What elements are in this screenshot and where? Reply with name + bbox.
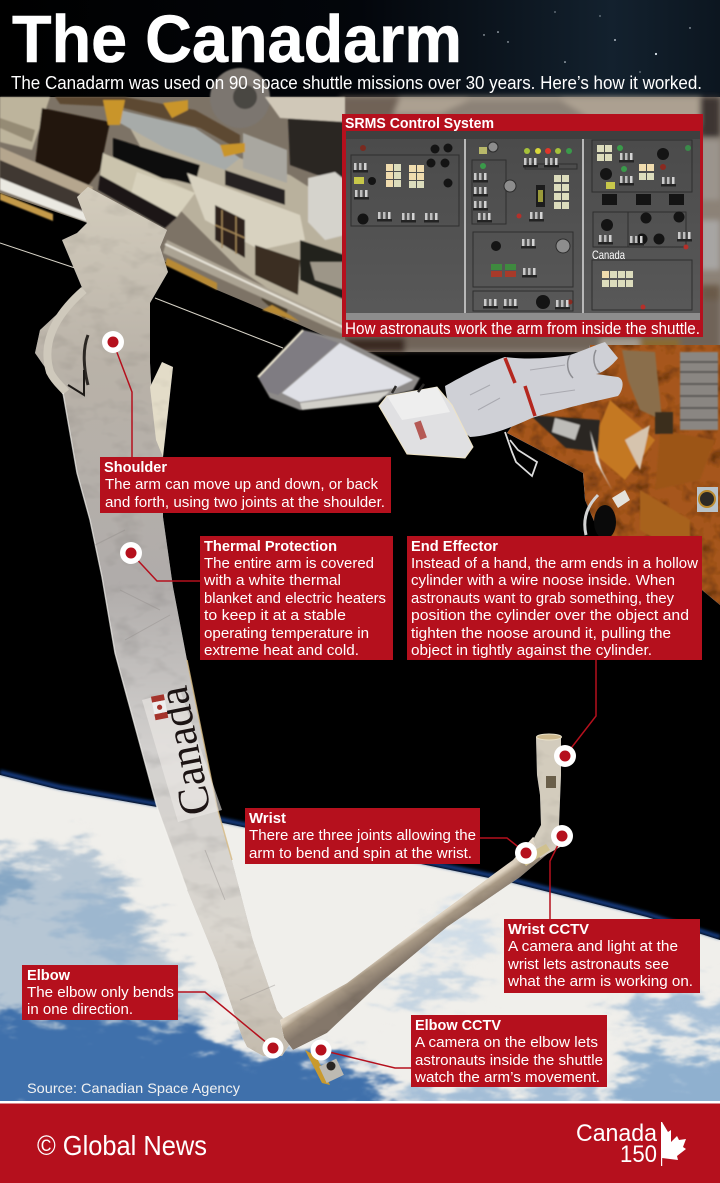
callout: shoulder [100,457,391,513]
marker: elbow [262,1038,284,1058]
logo: Canada 150: 150 [620,1141,657,1168]
callout: thermal protection: The entire arm is covered [204,556,374,572]
callout: wrist: Wrist [249,810,286,827]
callout: end effector: tighten the noose around it, pulling the [411,626,671,642]
header starfield band [0,0,720,97]
arm lettering: Canada wordmark: Canada [148,682,221,819]
photo: astronaut [379,342,623,476]
leader lines [113,342,596,1068]
callout: thermal protection: Thermal Protection [204,538,337,555]
callout: wrist CCTV: Wrist CCTV [508,921,589,938]
photo: gold foil satellite [507,345,720,605]
callout: elbow: in one direction. [27,1002,133,1018]
Canadarm arm [35,187,562,1085]
callout: thermal protection: to keep it at a stable [204,608,346,624]
callout: end effector: End Effector [411,538,498,555]
marker: wrist CCTV [551,825,573,847]
marker: shoulder [102,331,124,353]
panel heading: SRMS Control System [345,115,494,132]
callout: wrist CCTV: wrist lets astronauts see [507,957,669,973]
marker: wrist [515,842,537,864]
callout: thermal protection: with a white thermal [203,573,341,589]
callout: wrist [245,808,480,864]
control panel illustration [346,131,700,320]
panel Canada logotype: Canada [592,248,625,262]
callout: wrist: There are three joints allowing the [249,828,476,844]
callout: wrist CCTV: A camera and light at the [508,939,678,955]
marker: elbow CCTV [310,1040,332,1060]
title: The Canadarm [12,2,462,77]
wrist and end effector [533,736,562,858]
callout: elbow: Elbow [27,967,70,984]
footer band [0,1101,720,1183]
callout: end effector [407,536,702,660]
marker: thermal protection [120,542,142,564]
callout: wrist: arm to bend and spin at the wrist. [249,846,472,862]
logo: Canada 150: Canada [576,1120,658,1147]
upper arm with shoulder [35,187,296,1056]
footer: Global News credit: © Global News [37,1130,207,1161]
marker: end effector [554,745,576,767]
callout: thermal protection [200,536,393,660]
callout: elbow CCTV: A camera on the elbow lets [415,1035,598,1051]
callout: thermal protection: extreme heat and cold. [204,643,359,659]
callout: shoulder: The arm can move up and down, or back [105,477,379,493]
callout: elbow [22,965,178,1020]
photo: white payload box [258,330,420,410]
forearm [280,837,552,1050]
earth [0,770,720,1130]
callout: thermal protection: operating temperature in [204,626,369,642]
callout: shoulder: Shoulder [104,459,167,476]
callout: end effector: Instead of a hand, the arm ends in a hollow [411,556,698,572]
callout: end effector: cylinder with a wire noose inside. When [411,573,675,589]
callout: thermal protection: blanket and electric heaters [204,591,386,607]
callout: elbow CCTV: astronauts inside the shuttle [415,1053,603,1069]
earth limb glow [0,772,720,937]
callout: end effector: position the cylinder over the object and [411,608,689,624]
callout: elbow: The elbow only bends [27,985,174,1001]
photo: payload bay truss [0,68,345,345]
callout: wrist CCTV: what the arm is working on. [507,974,693,990]
photo: shuttle structure behind control panel [340,97,720,352]
elbow camera [305,1050,330,1085]
callout: shoulder: and forth, using two joints at the shoulder. [105,495,385,511]
panel: SRMS control system [342,114,703,338]
callout: wrist CCTV [504,919,700,993]
source credit: Source: Canadian Space Agency [27,1080,240,1096]
callout: end effector: object in tightly against the cylinder. [411,643,652,659]
callout: elbow CCTV: Elbow CCTV [415,1017,501,1034]
callout: elbow CCTV [411,1015,607,1087]
panel caption: How astronauts work the arm from inside the shuttle. [345,320,700,338]
logo: Canada 150 [576,1120,686,1168]
photo: tether line [0,243,283,348]
callout: elbow CCTV: watch the arm’s movement. [414,1070,600,1086]
callout: end effector: astronauts want to grab something, they [411,591,675,607]
